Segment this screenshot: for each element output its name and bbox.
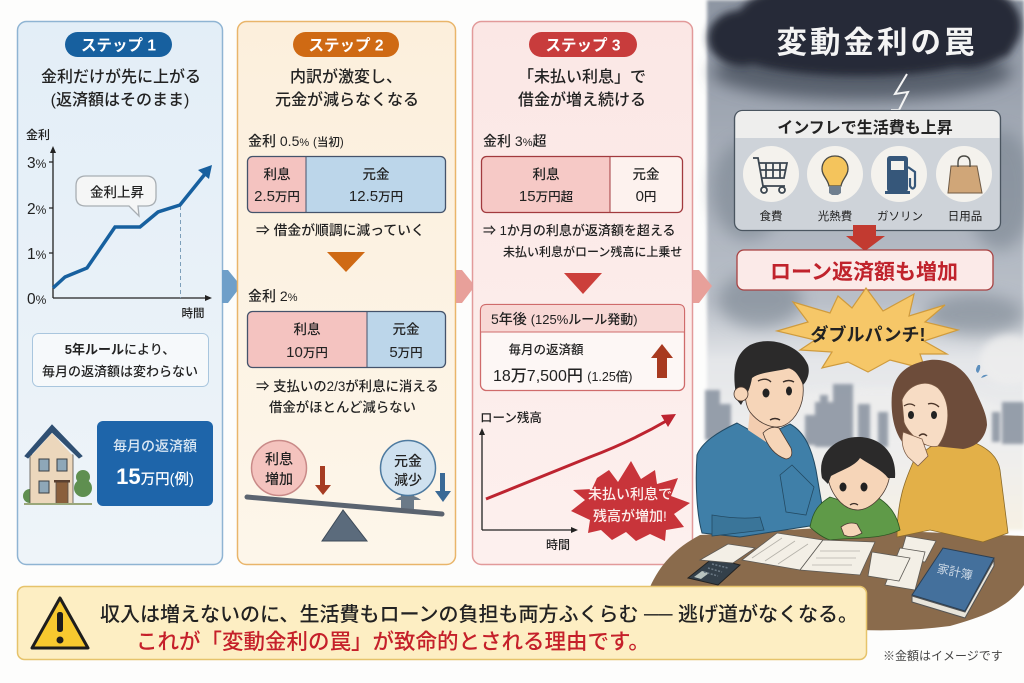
ball: principal down: 元金: [394, 453, 422, 469]
arrow: to loan payment: [846, 225, 885, 251]
man: [696, 341, 822, 537]
bar: 2% breakdown: 元金: [392, 322, 420, 337]
seesaw illustration: [247, 440, 451, 541]
bar: 2% breakdown: [248, 312, 446, 368]
loan balance line chart: 時間: [546, 537, 570, 552]
icon: warning: [32, 598, 88, 648]
result text: two thirds goes to interest: 借金がほとんど減らない: [269, 399, 416, 415]
starburst: double punch: [777, 288, 958, 372]
bar: 3% breakdown: 15万円超: [519, 188, 574, 205]
result text: two thirds goes to interest: ⇒ 支払いの2/3が利息に消える: [256, 378, 439, 394]
callout burst: balance grows: 残高が増加!: [593, 508, 667, 524]
arrow: down: [564, 273, 602, 294]
step 3 badge: [529, 32, 637, 57]
message line 2: これが「変動金利の罠」が致命的とされる理由です。: [136, 630, 650, 654]
card: five years later: 5年後 (125%ルール発動): [491, 311, 638, 327]
step 1 heading: 金利だけが先に上がる: [41, 67, 201, 86]
icon: shopping bag: 日用品: [948, 210, 982, 223]
interest rate line chart: 3%: [27, 155, 47, 172]
arrow: step 2 to step 3: [456, 270, 475, 303]
illustration: worried family: [650, 341, 1024, 640]
step 2 heading: 元金が減らなくなる: [275, 90, 419, 109]
interest rate line chart: 時間: [182, 306, 204, 320]
result text: unpaid interest added: 未払い利息がローン残高に上乗せ: [503, 244, 682, 259]
ball: interest up: 増加: [265, 471, 293, 487]
receipts: [700, 536, 936, 590]
panel: step 1: [18, 22, 222, 564]
footnote: ※金額はイメージです: [883, 649, 1003, 663]
interest rate line chart: 2%: [27, 201, 47, 218]
step 1 heading: [41, 67, 201, 109]
bar: 0.5% breakdown: [248, 156, 446, 212]
result text: debt decreases: ⇒ 借金が順調に減っていく: [256, 222, 425, 238]
icon: food cart: [743, 146, 799, 223]
step 3 heading: 借金が増え続ける: [518, 90, 646, 109]
icon: house: [23, 425, 92, 505]
result text: two thirds goes to interest: [256, 378, 439, 415]
notebook on table: [742, 533, 875, 575]
bar: 3% breakdown: [482, 156, 682, 212]
household ledger: [912, 548, 994, 618]
callout: rate rising: [76, 176, 156, 216]
interest rate line chart: 1%: [27, 246, 47, 263]
step 3 badge: ステップ 3: [546, 36, 621, 54]
icon: shopping bag: [936, 146, 992, 223]
note: five year rule: 5年ルールにより、: [65, 342, 175, 357]
household ledger: 家計簿: [936, 561, 974, 583]
lightning: [891, 74, 908, 110]
child: [810, 437, 900, 540]
starburst: double punch: ダブルパンチ!: [811, 324, 925, 345]
arrow: step 1 to step 2: [222, 270, 241, 303]
icon: food cart: 食費: [760, 209, 782, 223]
ball: principal down: 減少: [394, 472, 422, 488]
bar: 3% breakdown: 元金: [632, 167, 660, 182]
banner: loan payment increases: [737, 250, 993, 290]
step 3 heading: 「未払い利息」で: [518, 68, 646, 86]
panel: inflation living costs: インフレで生活費も上昇: [777, 119, 953, 137]
icon: gas pump: ガソリン: [877, 210, 923, 223]
interest rate line chart: 金利: [26, 127, 50, 142]
result text: unpaid interest added: [483, 223, 682, 259]
rate label 3% plus: 金利 3%超: [483, 133, 546, 149]
icon: light bulb: 光熱費: [818, 209, 852, 223]
panel: inflation living costs: [734, 110, 1000, 230]
monthly payment card: [97, 421, 213, 506]
step 3 heading: [518, 68, 646, 109]
note: five year rule: 毎月の返済額は変わらない: [42, 364, 198, 379]
loan balance line chart: ローン残高: [480, 410, 542, 425]
ball: principal down: [380, 440, 436, 496]
callout burst: balance grows: 未払い利息で: [588, 486, 672, 502]
panel: step 2: [238, 22, 456, 564]
bottom message banner: [18, 586, 866, 660]
interest rate line chart: 0%: [27, 291, 47, 308]
arrow: blue down: [435, 473, 451, 502]
arrow: step 3 to right panel: [693, 270, 712, 303]
rate label 2%: 金利 2%: [248, 288, 298, 304]
message line 1: 収入は増えないのに、生活費もローンの負担も両方ふくらむ ── 逃げ道がなくなる。: [100, 603, 858, 626]
icon: gas pump: [871, 146, 927, 223]
card: five years later: [480, 304, 684, 390]
step 2 badge: [293, 32, 399, 57]
step 2 heading: [275, 67, 419, 109]
bar: 2% breakdown: 5万円: [389, 344, 423, 361]
title: 変動金利の罠: [776, 26, 978, 60]
ball: interest up: 利息: [265, 451, 293, 467]
bar: 2% breakdown: 10万円: [286, 344, 328, 361]
callout: rate rising: 金利上昇: [90, 185, 144, 200]
bar: 2% breakdown: 利息: [294, 321, 321, 337]
note: five year rule: [32, 334, 208, 386]
step 1 badge: ステップ 1: [81, 36, 156, 54]
arrow: red down: [315, 466, 331, 495]
bar: 3% breakdown: 0円: [636, 188, 656, 205]
icon: light bulb: [807, 146, 863, 223]
step 1 heading: (返済額はそのまま): [51, 91, 189, 109]
bar: 0.5% breakdown: 元金: [362, 167, 390, 182]
calculator: [688, 558, 740, 585]
bar: 0.5% breakdown: 12.5万円: [349, 188, 403, 205]
bar: 0.5% breakdown: 利息: [264, 166, 291, 182]
woman: [892, 360, 1008, 542]
banner: loan payment increases: ローン返済額も増加: [770, 261, 958, 284]
storm sky background: [707, 0, 1024, 530]
bar: 0.5% breakdown: 2.5万円: [254, 188, 300, 205]
panel: step 3: [472, 22, 692, 564]
monthly payment card: 15万円(例): [116, 464, 194, 489]
bar: 3% breakdown: 利息: [532, 166, 560, 182]
callout burst: balance grows: [571, 461, 690, 541]
interest rate line chart: [26, 127, 212, 320]
card: five years later: 18万7,500円 (1.25倍): [493, 368, 632, 385]
arrow: payment up: [651, 344, 673, 378]
dark cloud: [708, 0, 1021, 100]
rate label 0.5%: 金利 0.5% (当初): [248, 133, 344, 149]
step 2 badge: ステップ 2: [309, 36, 383, 54]
card: five years later: 毎月の返済額: [508, 342, 584, 357]
step 1 badge: [65, 32, 172, 57]
table: [650, 528, 1024, 640]
ball: interest up: [252, 440, 306, 496]
result text: unpaid interest added: ⇒ 1か月の利息が返済額を超える: [483, 223, 675, 238]
skyline: [705, 384, 1024, 447]
arrow: down: [327, 252, 365, 272]
monthly payment card: 毎月の返済額: [113, 438, 197, 454]
step 2 heading: 内訳が激変し、: [290, 67, 402, 86]
loan balance line chart: [479, 410, 690, 552]
